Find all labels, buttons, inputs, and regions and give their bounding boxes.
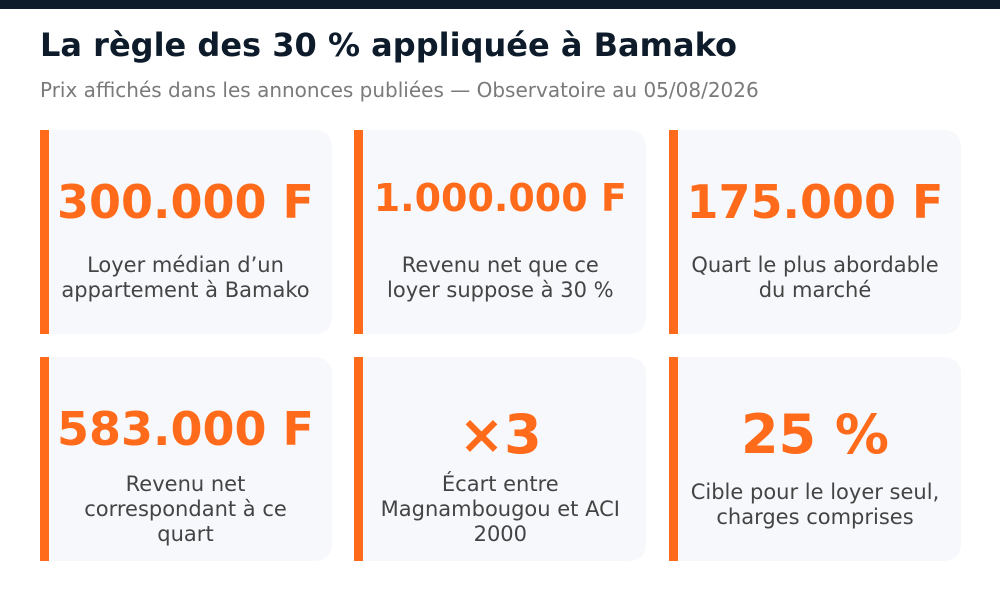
- panel: rent target: charges comprises: [716, 505, 914, 529]
- panel: most affordable quarter: [669, 130, 961, 334]
- panel: most affordable quarter: 175.000 F: [687, 175, 943, 229]
- panel: matching income: Revenu net: [126, 472, 245, 496]
- panel: gap between neighbourhoods: Magnambougou et ACI: [381, 497, 620, 521]
- panel: implied income: [354, 130, 646, 334]
- panel: most affordable quarter: Quart le plus abordable: [691, 253, 939, 277]
- panel: implied income: loyer suppose à 30 %: [387, 278, 614, 302]
- subtitle: Prix affichés dans les annonces publiées — Observatoire au 05/08/2026: [40, 78, 759, 102]
- panel: median rent: 300.000 F: [57, 175, 314, 229]
- title: La règle des 30 % appliquée à Bamako: [40, 26, 737, 64]
- panel: matching income: correspondant à ce: [84, 497, 287, 521]
- panel: matching income: quart: [157, 522, 214, 546]
- panel: median rent: [40, 130, 332, 334]
- panel: matching income: 583.000 F: [57, 402, 314, 456]
- panel: matching income: [40, 357, 332, 561]
- panel: rent target: [669, 357, 961, 561]
- panel: median rent: appartement à Bamako: [61, 278, 310, 302]
- panel: gap between neighbourhoods: [354, 357, 646, 561]
- panel: rent target: 25 %: [741, 403, 889, 466]
- panel: gap between neighbourhoods: ×3: [459, 403, 542, 466]
- panel: gap between neighbourhoods: 2000: [474, 522, 527, 546]
- panel: gap between neighbourhoods: Écart entre: [442, 472, 559, 496]
- panel: implied income: 1.000.000 F: [374, 176, 627, 220]
- panel: median rent: Loyer médian d’un: [87, 253, 284, 277]
- panel: most affordable quarter: du marché: [759, 278, 871, 302]
- panel: rent target: Cible pour le loyer seul,: [691, 480, 939, 504]
- top bar: [0, 0, 1000, 9]
- panel: implied income: Revenu net que ce: [402, 253, 599, 277]
